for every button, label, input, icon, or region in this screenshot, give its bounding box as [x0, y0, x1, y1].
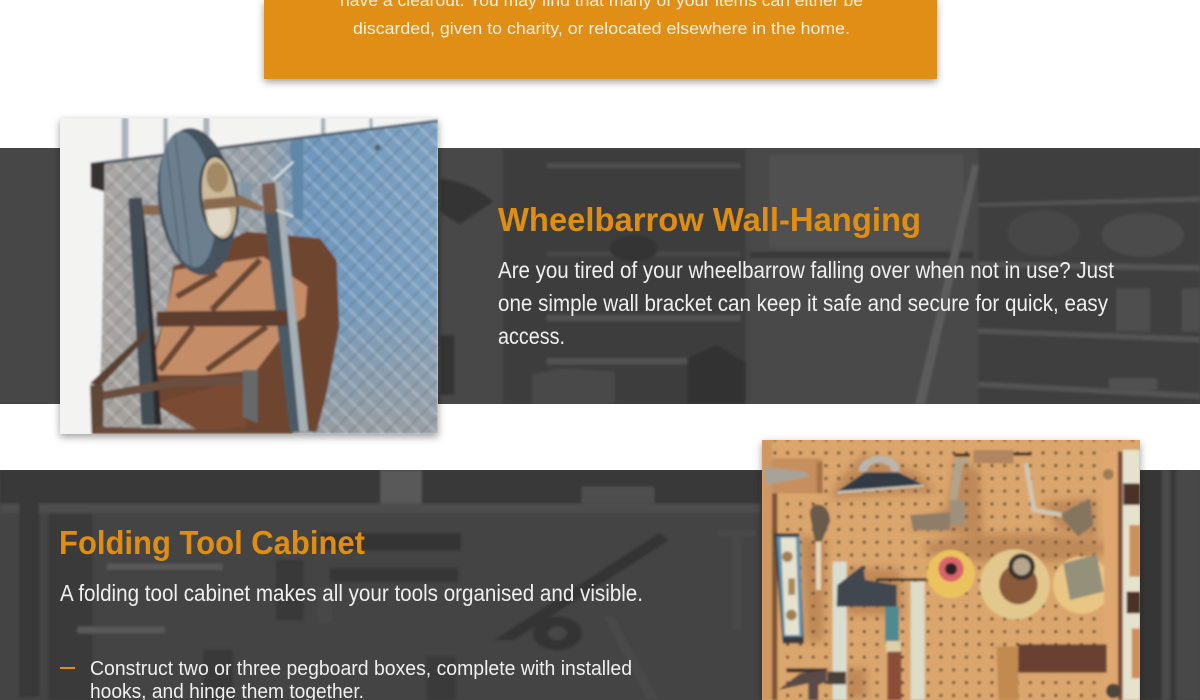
orange callout panel	[264, 0, 937, 79]
body text: wheelbarrow	[498, 257, 1115, 349]
heading: Folding Tool Cabinet: Folding Tool Cabinet	[59, 524, 365, 561]
panel background: tool wall	[0, 470, 1200, 700]
photo: wheelbarrow on wall	[60, 118, 438, 434]
callout text	[340, 0, 863, 38]
panel background: garage shelves	[440, 148, 1200, 405]
panel: wheelbarrow wall-hanging	[0, 148, 1200, 405]
callout text: discarded, given to charity, or relocated elsewhere in the home.	[353, 19, 850, 38]
bullet: construct pegboard boxes	[60, 658, 632, 700]
heading: Wheelbarrow Wall-Hanging: Wheelbarrow Wall-Hanging	[498, 201, 921, 238]
bullet: construct pegboard boxes: Construct two or three pegboard boxes, complete with installed	[90, 658, 632, 680]
body text: wheelbarrow: one simple wall bracket can keep it safe and secure for quick, easy	[498, 290, 1108, 316]
photo: pegboard with tools	[762, 440, 1140, 700]
body text: wheelbarrow: Are you tired of your wheelbarrow falling over when not in use? Just	[498, 257, 1115, 283]
panel: folding tool cabinet	[0, 470, 1200, 700]
body text: wheelbarrow: access.	[498, 323, 565, 349]
intro text: folding cabinet: A folding tool cabinet makes all your tools organised and visible.	[60, 580, 643, 606]
